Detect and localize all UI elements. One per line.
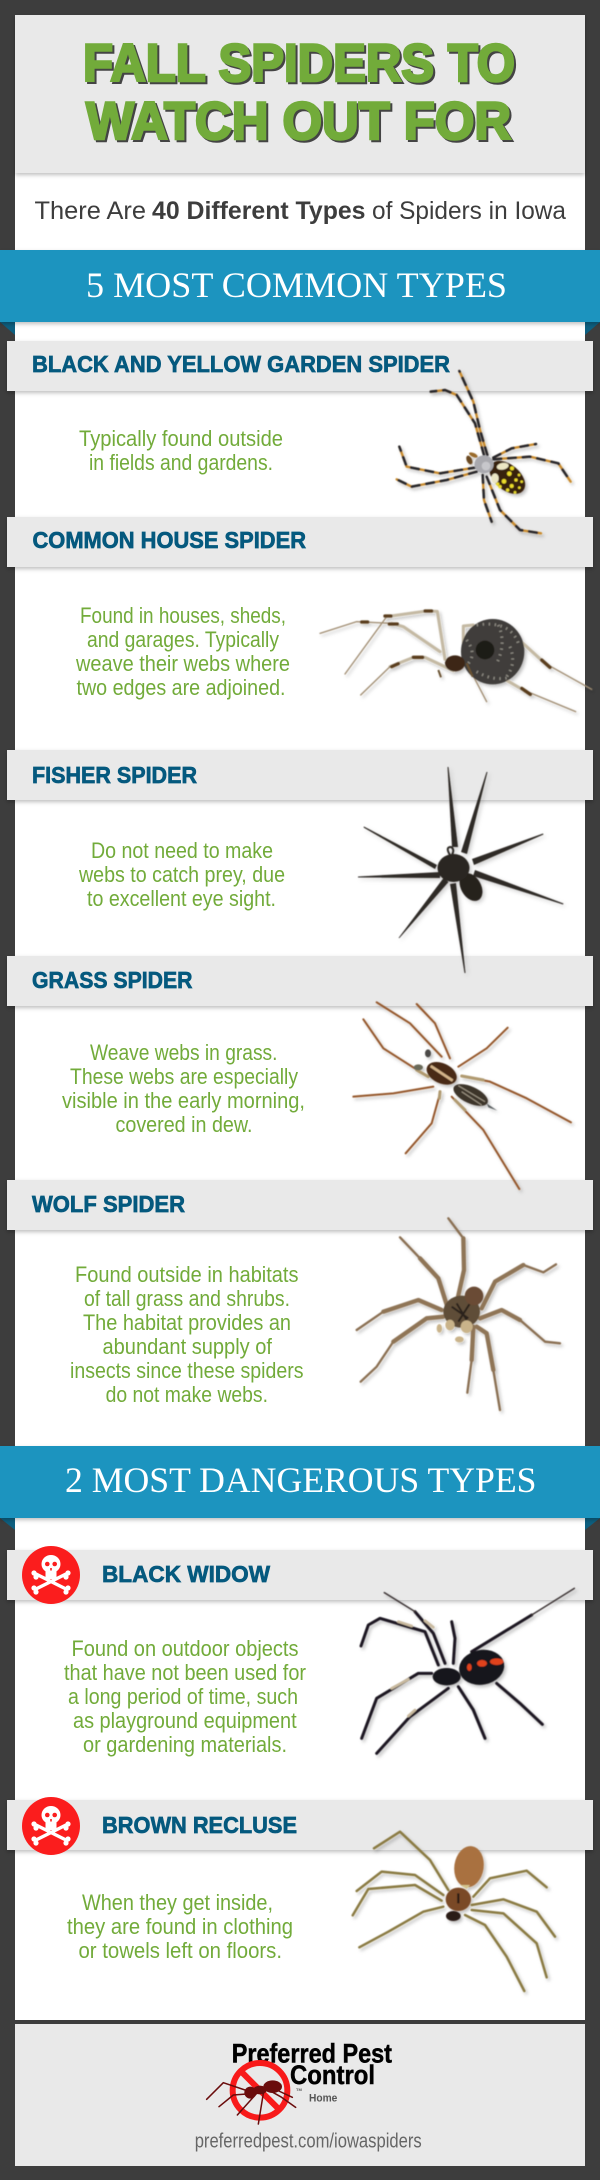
description: house spider: weave their webs where [75, 651, 290, 676]
footer panel [15, 2024, 585, 2166]
description: wolf spider: of tall grass and shrubs. [84, 1286, 290, 1311]
description: fisher spider: Do not need to make [91, 838, 273, 863]
heading: black widow: BLACK WIDOW [102, 1561, 270, 1587]
description: house spider: and garages. Typically [87, 627, 279, 652]
description: black widow: that have not been used for [64, 1660, 306, 1685]
description: grass spider: Weave webs in grass. [90, 1040, 278, 1065]
subtitle: There Are [34, 197, 146, 225]
description: wolf spider: insects since these spiders [70, 1358, 304, 1383]
heading: fisher spider: FISHER SPIDER [32, 762, 197, 788]
description: grass spider: These webs are especially [70, 1064, 298, 1089]
logo wordmark: Home [309, 2093, 337, 2105]
subtitle [34, 197, 566, 225]
icon: brown recluse spider [353, 1832, 555, 1991]
logo icon: ant in no-symbol [207, 2063, 296, 2124]
description: house spider: two edges are adjoined. [76, 675, 286, 700]
description: black widow: Found on outdoor objects [72, 1636, 298, 1661]
description: fisher spider: webs to catch prey, due [78, 862, 285, 887]
description: wolf spider [70, 1262, 304, 1407]
description: wolf spider: The habitat provides an [83, 1310, 291, 1335]
heading: common house spider: COMMON HOUSE SPIDER [32, 527, 306, 553]
logo wordmark [232, 2039, 392, 2105]
description: house spider [75, 603, 290, 700]
heading: brown recluse [7, 1800, 593, 1850]
heading: black and yellow garden spider [7, 341, 593, 391]
icon: black and yellow garden spider [397, 371, 571, 533]
logo wordmark: TM [296, 2087, 302, 2092]
icon: grass spider [353, 1002, 571, 1189]
description: garden spider [79, 426, 283, 475]
description: grass spider: visible in the early morning, [62, 1088, 305, 1113]
website url: preferredpest.com/iowaspiders [195, 2131, 422, 2153]
heading: black widow [7, 1550, 593, 1600]
description: black widow [64, 1636, 306, 1757]
ribbon: 5 most common types: 5 MOST COMMON TYPES [86, 265, 507, 305]
description: wolf spider: do not make webs. [106, 1382, 268, 1407]
description: brown recluse: they are found in clothing [67, 1914, 293, 1939]
icon: common house spider [320, 611, 592, 712]
subtitle: 40 Different Types [152, 197, 366, 225]
heading: wolf spider: WOLF SPIDER [32, 1191, 185, 1217]
heading: common house spider [7, 517, 593, 567]
description: black widow: a long period of time, such [68, 1684, 298, 1709]
title [83, 34, 517, 153]
heading: grass spider: GRASS SPIDER [32, 967, 193, 993]
heading: wolf spider [7, 1180, 593, 1230]
heading: black and yellow garden spider: BLACK AND YELLOW GARDEN SPIDER [32, 351, 450, 377]
subtitle: of Spiders in Iowa [372, 197, 566, 225]
description: wolf spider: Found outside in habitats [75, 1262, 298, 1287]
description: grass spider [62, 1040, 305, 1137]
description: garden spider: Typically found outside [79, 426, 283, 451]
logo: preferred pest control [207, 2039, 392, 2124]
description: brown recluse: or towels left on floors. [78, 1938, 282, 1963]
description: black widow: as playground equipment [73, 1708, 297, 1733]
icon: wolf spider [357, 1218, 560, 1410]
description: brown recluse [67, 1890, 293, 1963]
logo wordmark: Control [290, 2060, 375, 2090]
description: brown recluse: When they get inside, [82, 1890, 273, 1915]
heading: fisher spider [7, 750, 593, 800]
description: grass spider: covered in dew. [116, 1112, 252, 1137]
icon: skull warning, black widow [22, 1546, 80, 1604]
icon: black widow spider [361, 1588, 574, 1753]
ribbon: 2 most dangerous types: 2 MOST DANGEROUS TYPES [65, 1460, 536, 1500]
panel: title [15, 15, 585, 173]
title: WATCH OUT FOR [86, 92, 511, 151]
description: garden spider: in fields and gardens. [89, 450, 273, 475]
heading: brown recluse: BROWN RECLUSE [102, 1812, 297, 1838]
ribbon: 5 most common types [0, 250, 600, 335]
title: FALL SPIDERS TO [83, 34, 515, 93]
icon: skull warning, brown recluse [22, 1797, 80, 1855]
title: WATCH OUT FOR [88, 94, 513, 153]
title: FALL SPIDERS TO [85, 36, 517, 95]
description: house spider: Found in houses, sheds, [80, 603, 286, 628]
ribbon: 2 most dangerous types [0, 1446, 600, 1530]
description: black widow: or gardening materials. [83, 1732, 287, 1757]
description: wolf spider: abundant supply of [102, 1334, 273, 1359]
description: fisher spider [78, 838, 285, 911]
heading: grass spider [7, 956, 593, 1006]
logo wordmark: Preferred Pest [232, 2039, 392, 2069]
icon: fisher spider [358, 767, 564, 973]
description: fisher spider: to excellent eye sight. [87, 886, 276, 911]
